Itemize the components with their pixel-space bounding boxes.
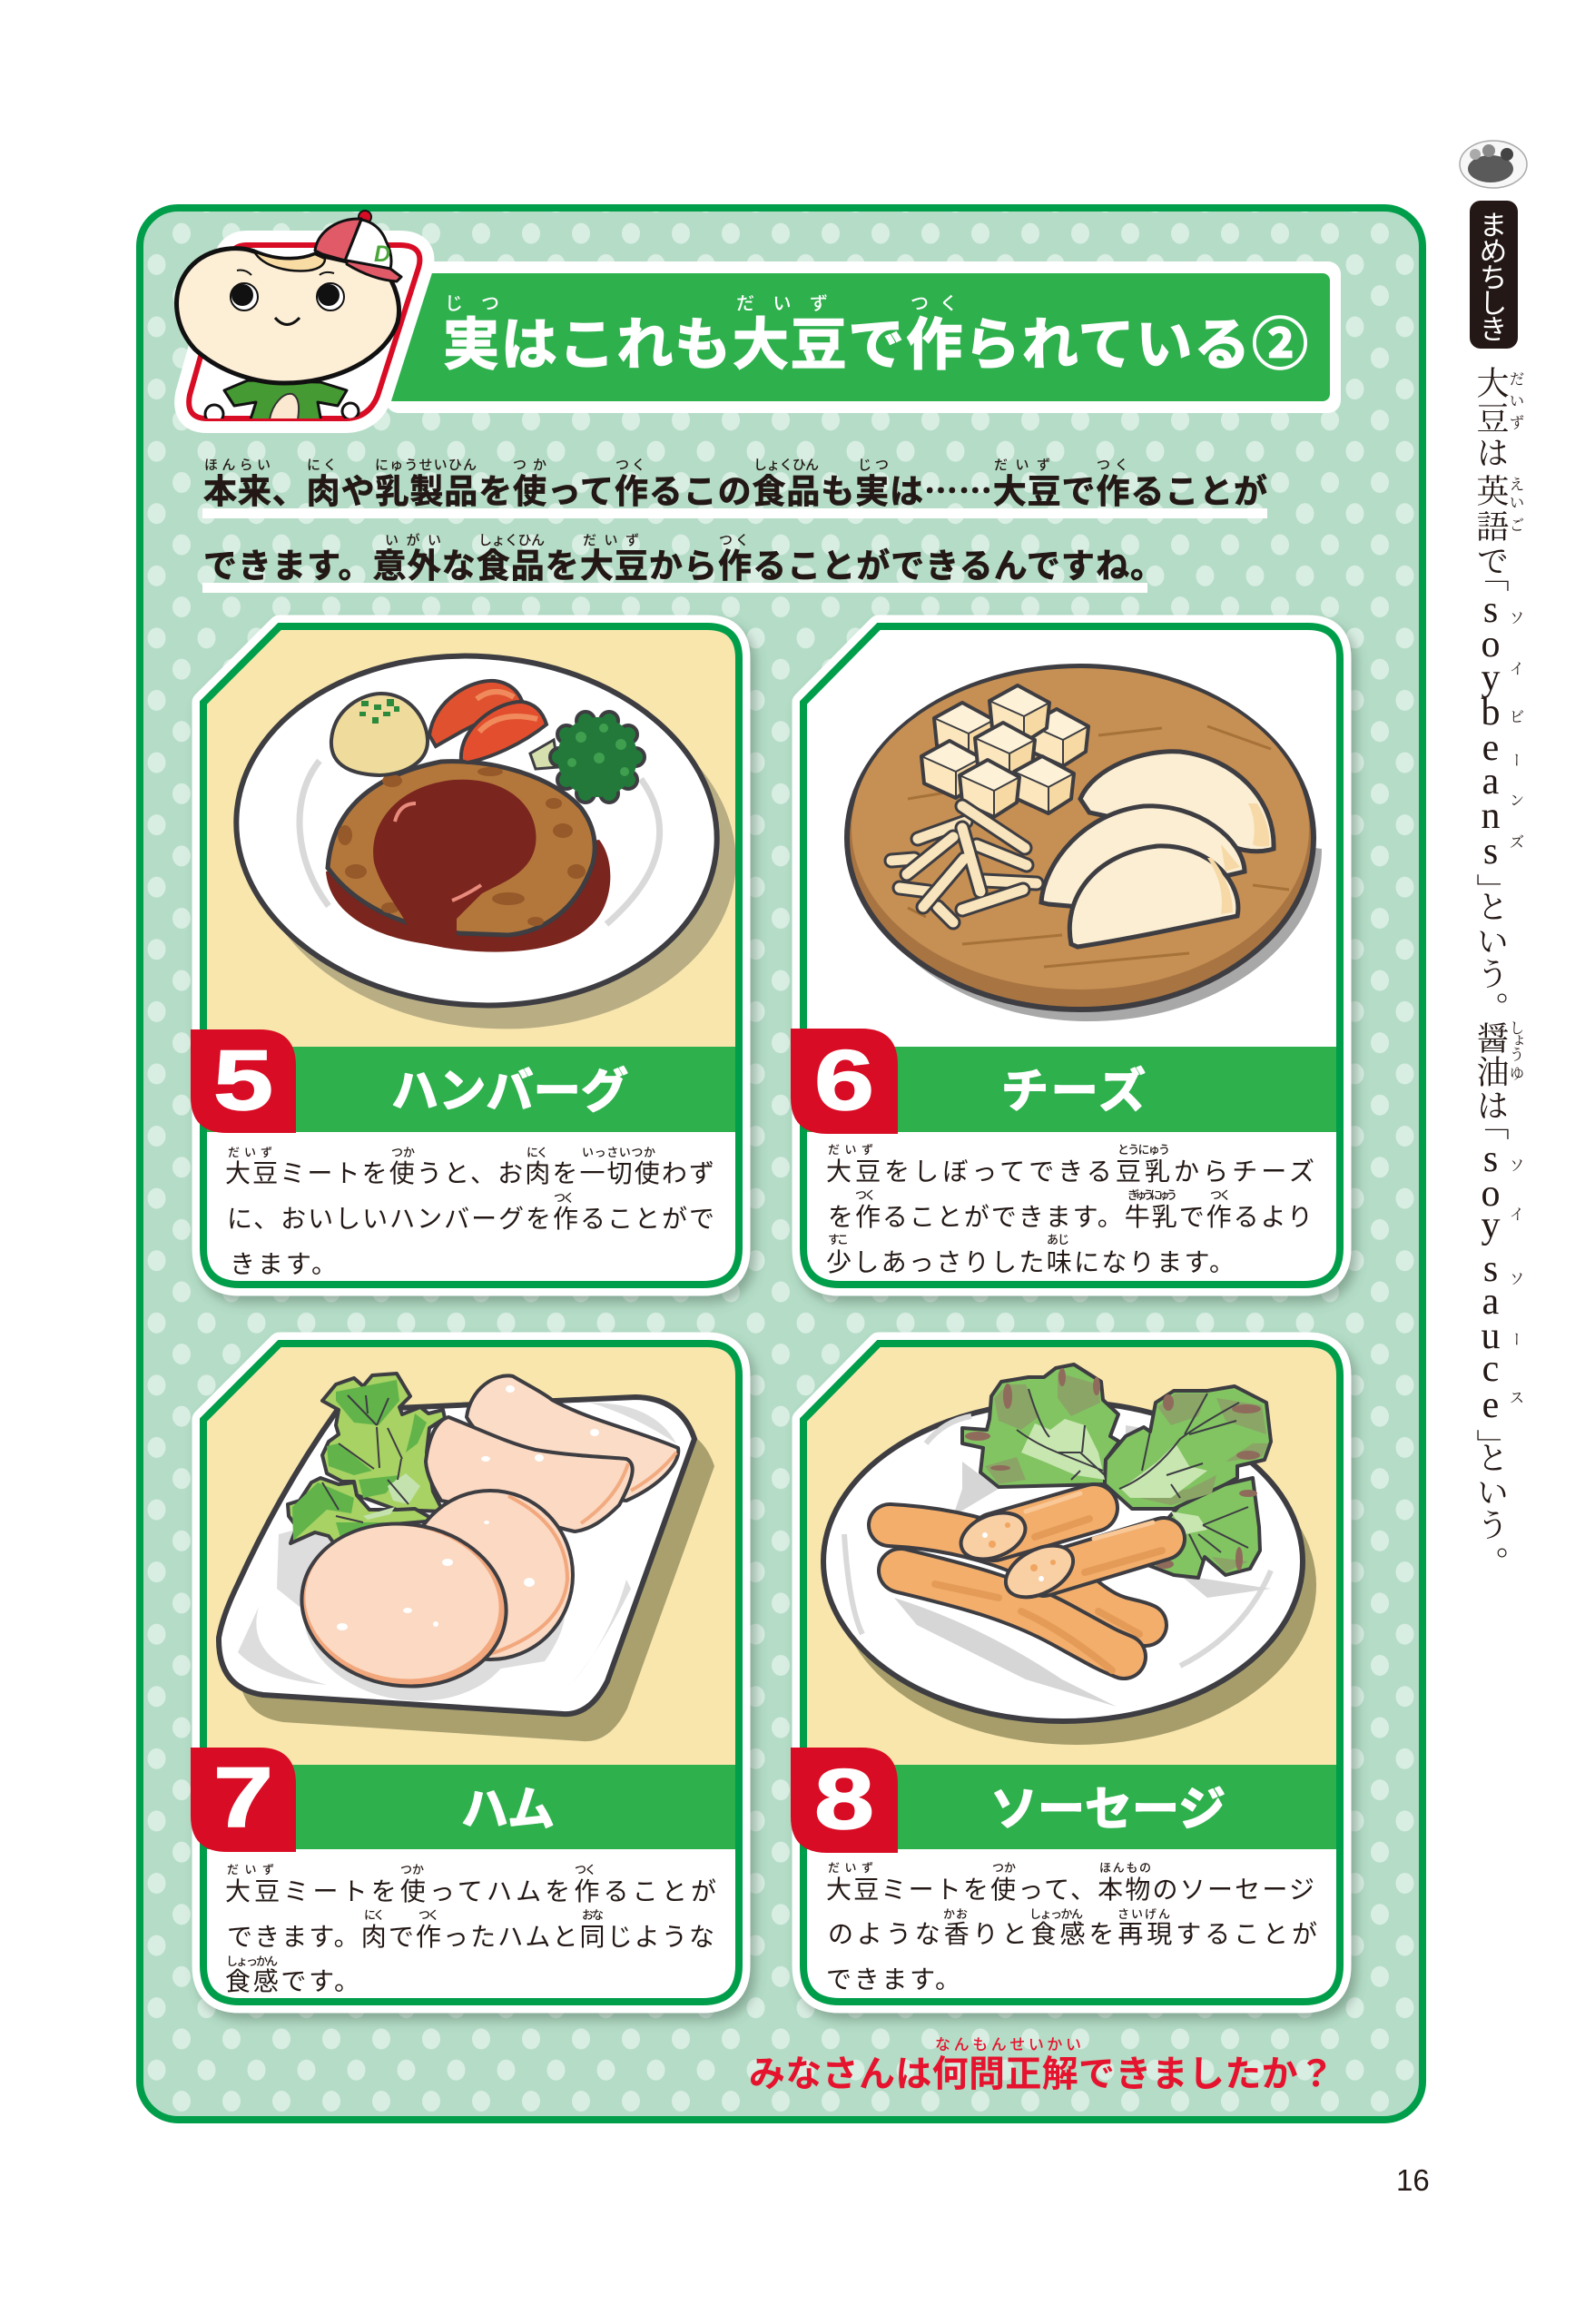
description 6: ぎゅうにゅう bbox=[1127, 1188, 1177, 1202]
number badge 6: 6 bbox=[814, 1032, 874, 1128]
sidebar vertical text: 大豆は英語で「soybeans 」という。 bbox=[1470, 366, 1511, 1024]
panel: main green dotted frame bbox=[140, 208, 1423, 2120]
panel: card 7 ham bbox=[191, 1344, 744, 2002]
mascot: hair tuft bbox=[254, 251, 325, 271]
title ruby: じつ bbox=[445, 294, 499, 314]
description 5 bbox=[225, 1146, 714, 1278]
description 6: 少しあっさりした味になります。 bbox=[826, 1248, 1235, 1276]
description 6: あじ bbox=[1047, 1233, 1069, 1246]
page number: 16 bbox=[1396, 2163, 1430, 2197]
title ruby bbox=[445, 293, 958, 314]
panel: card 5 hamburger bbox=[191, 626, 748, 1285]
description 7: つく bbox=[575, 1863, 596, 1876]
description 7: 食感です。 bbox=[225, 1967, 359, 1995]
description 5: 大豆ミートを使うと、お肉を一切使わず bbox=[225, 1159, 714, 1187]
sidebar vertical ruby: ソイソース bbox=[1505, 1157, 1529, 1405]
intro ruby line 1: つく bbox=[615, 458, 645, 473]
number badge 6 bbox=[791, 1029, 898, 1134]
description 6: 大豆をしぼってできる豆乳からチーズ bbox=[826, 1157, 1314, 1186]
closing question: みなさんは何問正解できましたか？ bbox=[749, 2054, 1334, 2094]
description 5: きます。 bbox=[230, 1250, 337, 1278]
intro ruby line 2 bbox=[385, 532, 749, 548]
cheese wedges bbox=[1080, 752, 1274, 852]
sausages bbox=[890, 1493, 1164, 1670]
intro ruby line 1: ほんらい bbox=[204, 458, 271, 473]
mascot: eyes bbox=[231, 271, 344, 310]
description 8 bbox=[826, 1861, 1317, 1994]
title banner bbox=[386, 261, 1341, 413]
potato bbox=[331, 694, 428, 775]
heading: ハンバーグ: ハンバーグ bbox=[391, 1066, 628, 1118]
tomato wedges bbox=[429, 681, 522, 746]
description 5: つく bbox=[554, 1191, 575, 1205]
number badge 7: 7 bbox=[213, 1749, 273, 1845]
description 8: できます。 bbox=[826, 1965, 960, 1994]
description 8: ほんもの bbox=[1099, 1861, 1151, 1875]
closing question: なんもんせいかい bbox=[935, 2036, 1081, 2053]
description 8: しょっかん bbox=[1029, 1907, 1083, 1921]
description 7: しょっかん bbox=[226, 1955, 278, 1968]
title text: 実はこれも大豆で作られている② bbox=[443, 314, 1308, 377]
sidebar vertical ruby: だいず bbox=[1505, 370, 1529, 430]
mascot: smile bbox=[275, 318, 300, 325]
number badge 5 bbox=[191, 1029, 296, 1133]
number badge 8 bbox=[791, 1748, 898, 1853]
intro ruby line 1: つか bbox=[513, 458, 546, 473]
description 6: すこ bbox=[828, 1233, 849, 1246]
intro ruby line 1: つく bbox=[1097, 458, 1128, 473]
description 5: に、おいしいハンバーグを作ることがで bbox=[227, 1205, 714, 1233]
panel: card 8 sausage bbox=[791, 1344, 1344, 2002]
panel: card 6 cheese bbox=[791, 626, 1344, 1285]
intro ruby line 2: いがい bbox=[385, 532, 441, 548]
ham slice front bbox=[300, 1521, 508, 1689]
folded ham front bbox=[426, 1417, 633, 1531]
mascot: cap bbox=[315, 211, 401, 281]
description 5: いっさいつか bbox=[582, 1146, 655, 1159]
cheese cubes bbox=[921, 685, 1088, 817]
description 7: つか bbox=[400, 1863, 424, 1876]
intro line 1: 本来、肉や乳製品を使って作るこの食品も実は……大豆で作ることが bbox=[203, 464, 1267, 513]
description 5: つか bbox=[391, 1146, 415, 1159]
intro line 2: できます。意外な食品を大豆から作ることができるんですね。 bbox=[203, 538, 1164, 587]
description 6: つく bbox=[1210, 1188, 1231, 1202]
description 7: できます。肉で作ったハムと同じような bbox=[227, 1923, 714, 1951]
description 6: だいず bbox=[828, 1143, 873, 1157]
lettuce bbox=[288, 1374, 445, 1550]
description 7: おな bbox=[582, 1908, 604, 1922]
description 6: を作ることができます。牛乳で作るより bbox=[828, 1203, 1313, 1231]
heading: ハム: ハム bbox=[461, 1784, 555, 1837]
shredded cheese bbox=[891, 806, 1037, 922]
description 8: 大豆ミートを使って、本物のソーセージ bbox=[826, 1876, 1314, 1904]
description 5: にく bbox=[527, 1146, 548, 1159]
description 6 bbox=[826, 1143, 1314, 1276]
intro ruby line 1: しょくひん bbox=[753, 458, 819, 473]
description 8: つか bbox=[992, 1861, 1016, 1875]
mascot: head bbox=[177, 249, 399, 383]
intro ruby line 1: にく bbox=[307, 458, 337, 473]
intro ruby line 1: だいず bbox=[994, 458, 1050, 473]
folded ham back bbox=[467, 1375, 678, 1501]
sidebar vertical ruby: えいご bbox=[1505, 476, 1529, 532]
description 6: とうにゅう bbox=[1117, 1143, 1170, 1157]
sidebar vertical ruby bbox=[1505, 370, 1529, 1405]
intro ruby line 2: つく bbox=[719, 533, 749, 548]
description 7: にく bbox=[364, 1908, 385, 1922]
mascot badge bbox=[177, 211, 419, 423]
description 8: だいず bbox=[828, 1861, 873, 1875]
number badge 7 bbox=[191, 1748, 296, 1852]
illustration: cheese board bbox=[847, 666, 1322, 1021]
title ruby: つく bbox=[911, 294, 958, 314]
description 8: さいげん bbox=[1117, 1907, 1170, 1921]
description 7: だいず bbox=[227, 1863, 274, 1876]
illustration: hamburger plate bbox=[233, 654, 735, 1029]
description 5: だいず bbox=[228, 1146, 272, 1159]
icon: sidebar plate bbox=[1460, 141, 1527, 188]
broccoli bbox=[530, 740, 558, 769]
lettuce bbox=[962, 1364, 1271, 1578]
intro ruby line 2: しょくひん bbox=[478, 533, 545, 548]
mascot: shirt bbox=[205, 380, 359, 423]
mascot: cap: D bbox=[374, 241, 390, 267]
description 7: つく bbox=[418, 1908, 439, 1922]
heading: チーズ: チーズ bbox=[1001, 1066, 1146, 1118]
sidebar vertical ruby: しょうゆ bbox=[1505, 1020, 1529, 1080]
description 6: つく bbox=[855, 1188, 876, 1202]
sidebar vertical ruby: ソイビーンズ bbox=[1505, 610, 1529, 850]
intro text bbox=[202, 458, 1267, 593]
ham slice back bbox=[408, 1491, 573, 1659]
sidebar vertical text bbox=[1470, 366, 1511, 1579]
sausage cut faces bbox=[959, 1511, 1075, 1600]
title ruby: だいず bbox=[736, 293, 828, 314]
description 8: かお bbox=[943, 1907, 968, 1921]
number badge 5: 5 bbox=[213, 1032, 273, 1128]
sidebar tag: まめちしき: まめちしき bbox=[1472, 211, 1514, 343]
illustration: sausage plate bbox=[823, 1364, 1316, 1745]
sidebar vertical text: 醤油は「 soy sauce 」という。 bbox=[1470, 1021, 1511, 1579]
number badge 8: 8 bbox=[814, 1751, 874, 1846]
intro ruby line 1: にゅうせいひん bbox=[375, 458, 477, 473]
description 7 bbox=[225, 1863, 716, 1995]
intro ruby line 1 bbox=[204, 458, 1128, 473]
intro ruby line 2: だいず bbox=[583, 533, 639, 548]
intro ruby line 1: じつ bbox=[858, 458, 889, 473]
illustration: ham plate bbox=[219, 1374, 714, 1741]
heading: ソーセージ: ソーセージ bbox=[990, 1784, 1226, 1837]
description 7: 大豆ミートを使ってハムを作ることが bbox=[225, 1877, 716, 1905]
closing question bbox=[749, 2036, 1334, 2094]
description 8: のような香りと食感を再現することが bbox=[828, 1920, 1317, 1948]
